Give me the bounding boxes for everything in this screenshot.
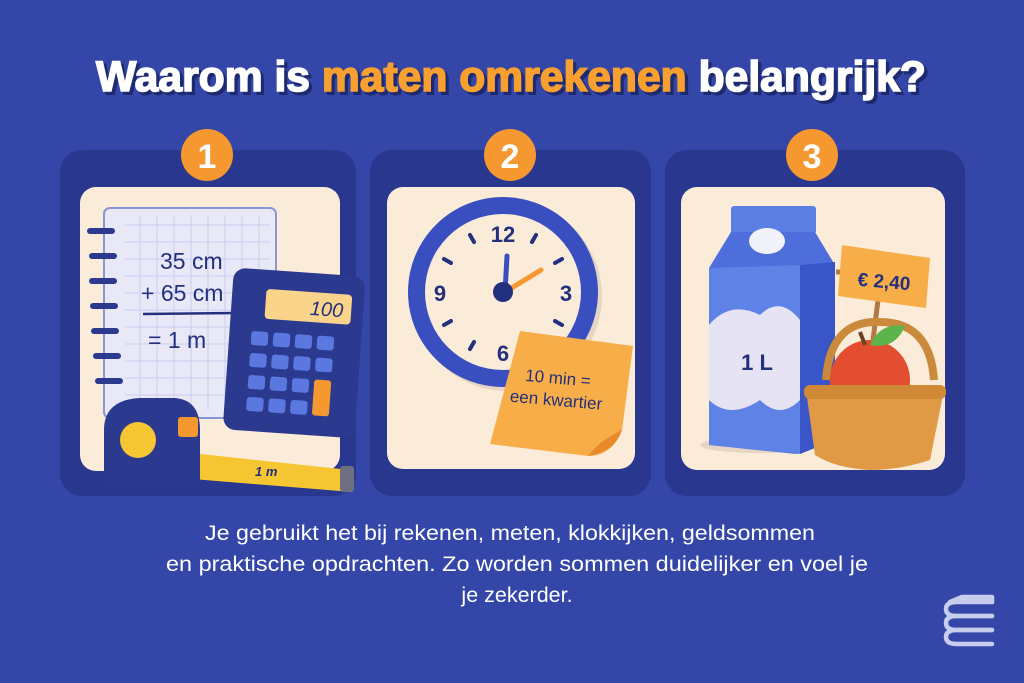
badge 2: 2: [501, 138, 519, 176]
badge 3: [786, 129, 838, 181]
panel 3: shopping: [665, 150, 965, 496]
sticky note: [490, 331, 633, 456]
icon: books: [946, 597, 992, 644]
clock: 12: [491, 222, 515, 247]
sticky note: een kwartier: [509, 387, 603, 414]
badge 1: 1: [198, 138, 216, 176]
sticky note: 10 min =: [524, 366, 592, 391]
milk carton: 1 L: [741, 350, 773, 375]
clock: 6: [497, 341, 509, 366]
badge 2: [484, 129, 536, 181]
notebook: 35 cm: [160, 248, 223, 274]
title: Waarom is maten omrekenen belangrijk?: [99, 56, 929, 104]
calculator: 100: [309, 298, 344, 322]
badge 1: [181, 129, 233, 181]
basket with apple: [804, 322, 946, 470]
tape measure: 1 m: [255, 464, 278, 479]
price tag: € 2,40: [857, 270, 911, 295]
price tag: [836, 245, 930, 340]
body text: [166, 521, 868, 607]
notebook: + 65 cm: [141, 280, 223, 306]
panel 1: calculation tools: [60, 150, 366, 496]
body text: en praktische opdrachten. Zo worden sommen duidelijker en voel je: [166, 552, 868, 576]
clock: 3: [560, 281, 572, 306]
panel 2: clock: [370, 150, 651, 496]
calculator: [223, 268, 366, 438]
milk carton: [700, 206, 835, 454]
clock: 9: [434, 281, 446, 306]
body text: Je gebruikt het bij rekenen, meten, klokkijken, geldsommen: [205, 521, 815, 545]
body text: je zekerder.: [460, 583, 573, 607]
tape measure: [104, 398, 354, 492]
notebook: = 1 m: [148, 327, 206, 353]
badge 3: 3: [803, 138, 821, 176]
notebook: [90, 208, 276, 418]
clock: [408, 197, 602, 391]
title: Waarom is maten omrekenen belangrijk?: [96, 53, 926, 101]
